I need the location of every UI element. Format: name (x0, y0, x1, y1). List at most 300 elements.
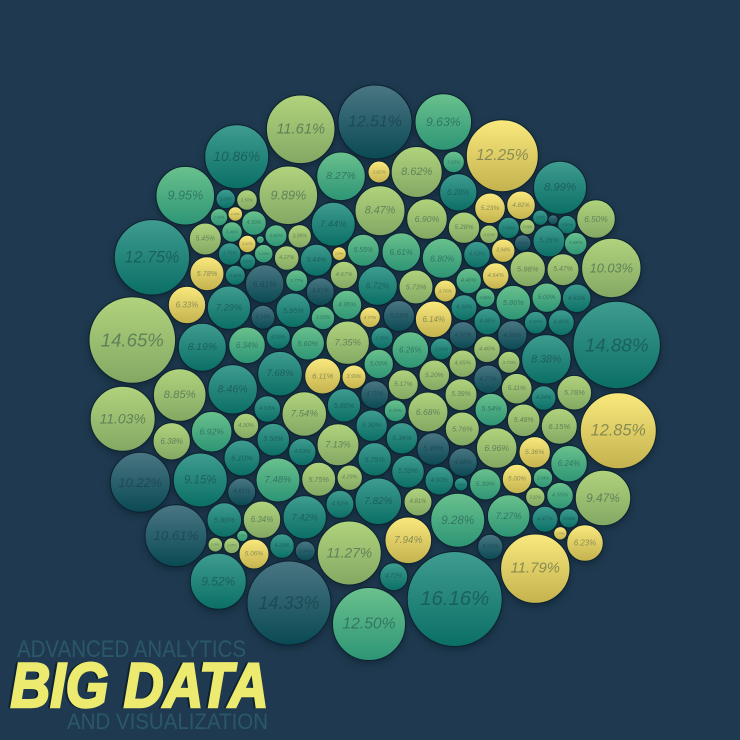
bubble 4.40% green: 4.40% (461, 278, 477, 284)
bubble 10.61%: 10.61% (153, 528, 199, 543)
bubble 5.11% (501, 373, 532, 404)
bubble 5.90%: 5.90% (214, 516, 235, 524)
bubble 3.88% center (476, 288, 495, 307)
bubble 4.95%: 4.95% (338, 302, 356, 308)
bubble 6.68% (408, 392, 448, 432)
bubble 5.55% (347, 234, 379, 266)
bubble 5.17% (388, 370, 418, 400)
bubble 7.82%: 7.82% (364, 496, 393, 507)
bubble 5.39% green (470, 469, 501, 500)
bubble 2.70%: 2.70% (555, 531, 565, 535)
bubble 11.79%: 11.79% (511, 561, 560, 577)
bubble 3.99% yellow (342, 365, 366, 389)
bubble 12.51%: 12.51% (348, 114, 402, 130)
bubble 14.33%: 14.33% (258, 593, 320, 613)
bubble 9.52% (190, 553, 246, 609)
bubble 7.29%: 7.29% (216, 303, 242, 313)
bubble 7.68% (258, 351, 302, 396)
bubble 4.29% teal (270, 534, 294, 558)
bubble 2.10% (548, 215, 558, 225)
bubble 5.44%: 5.44% (307, 257, 326, 264)
bubble 3.29% (384, 400, 406, 422)
bubble 3.77% green: 3.77% (290, 278, 303, 283)
title block (8, 636, 268, 734)
bubble 4.29% light: 4.29% (342, 475, 358, 481)
bubble 5.78% light: 5.78% (564, 388, 585, 397)
bubble 7.29% (207, 286, 251, 329)
bubble 12.75% (114, 220, 190, 295)
bubble 3.92%: 3.92% (435, 346, 448, 352)
bubble 5.98% (510, 251, 545, 287)
bubble 6.92%: 6.92% (199, 427, 224, 437)
bubble 5.73% (399, 270, 433, 304)
bubble 5.00% yellow (502, 464, 532, 494)
bubble 11.61% (266, 95, 335, 164)
bubble 6.61% dark (245, 265, 284, 303)
bubble 4.90%: 4.90% (431, 477, 449, 484)
bubble 2.10%: 2.10% (549, 219, 556, 221)
bubble 5.60% (291, 327, 324, 360)
bubble 4.52% (449, 322, 477, 349)
bubble 9.28%: 9.28% (441, 514, 474, 527)
bubble 3.53%: 3.53% (563, 516, 575, 521)
bubble 5.90% (207, 503, 242, 537)
bubble 7.48% (256, 458, 300, 502)
bubble 4.40% teal: 4.40% (553, 320, 569, 326)
bubble 5.75% light: 5.75% (308, 475, 330, 484)
bubble 5.75% light (302, 462, 336, 496)
bubble 10.86%: 10.86% (213, 149, 260, 164)
bubble 6.33%: 6.33% (176, 300, 198, 310)
bubble 8.38% (522, 335, 571, 384)
bubble 5.78% light (557, 375, 592, 410)
bubble 3.88% (564, 232, 587, 255)
bubble 3.78% (371, 327, 393, 349)
bubble 3.99% light: 3.99% (293, 233, 307, 239)
bubble 3.05% light: 3.05% (227, 544, 237, 548)
bubble 4.24%: 4.24% (536, 395, 551, 401)
bubble 4.33% (478, 534, 503, 560)
bubble 4.55%: 4.55% (552, 493, 568, 499)
bubble 3.76%: 3.76% (439, 288, 452, 294)
bubble 9.47% (575, 470, 631, 526)
bubble 3.09%: 3.09% (523, 225, 532, 229)
bubble 5.00% center: 5.00% (370, 360, 388, 368)
bubble 2.30% (256, 236, 264, 244)
bubble 3.88%: 3.88% (569, 240, 583, 246)
bubble 4.77% (474, 365, 502, 394)
bubble 6.50% (577, 200, 615, 238)
bubble 3.32% (526, 487, 545, 507)
bubble 5.66%: 5.66% (334, 401, 355, 410)
bubble 4.34% (451, 295, 477, 321)
bubble 5.00% yellow: 5.00% (508, 476, 526, 482)
bubble 3.99% yellow: 3.99% (347, 374, 362, 380)
bubble 4.54% (482, 263, 509, 289)
bubble 7.54%: 7.54% (291, 408, 318, 420)
bubble 4.75%: 4.75% (366, 392, 384, 398)
bubble 4.83%: 4.83% (568, 295, 586, 302)
bubble 4.72%: 4.72% (385, 574, 403, 580)
bubble 3.50% teal: 3.50% (561, 222, 573, 227)
bubble 5.20% (419, 360, 450, 391)
bubble 4.30% light: 4.30% (238, 423, 254, 429)
bubble 4.06% (266, 325, 290, 349)
bubble 9.63%: 9.63% (426, 115, 461, 129)
bubble 2.94% (332, 247, 346, 261)
bubble 2.92%: 2.92% (241, 242, 253, 246)
bubble 5.47%: 5.47% (553, 266, 573, 273)
bubble 5.78% yellow (190, 257, 224, 291)
bubble 5.39% green: 5.39% (476, 481, 495, 488)
bubble 8.85% (153, 369, 206, 421)
bubble 8.27% (317, 152, 365, 201)
bubble 4.62%: 4.62% (331, 501, 349, 507)
bubble 4.30% green: 4.30% (246, 220, 262, 226)
bubble 4.34%: 4.34% (456, 305, 472, 311)
bubble 3.77% yellow (360, 307, 380, 328)
bubble 5.34%: 5.34% (392, 435, 412, 442)
bubble 3.94% (492, 239, 515, 262)
bubble 5.60%: 5.60% (298, 339, 318, 348)
bubble 2.60% (228, 207, 243, 221)
bubble 6.10%: 6.10% (231, 454, 253, 462)
bubble 10.03% (582, 238, 641, 298)
bubble 16.16% (407, 552, 502, 646)
bubble 5.00% upper: 5.00% (538, 294, 556, 301)
bubble 11.27% (317, 521, 381, 585)
bubble 7.82% (355, 478, 402, 525)
bubble 4.68% (449, 448, 477, 477)
bubble cluster (89, 85, 660, 660)
bubble 3.75% (218, 243, 241, 265)
bubble 4.61% (306, 278, 334, 306)
bubble 6.38% (153, 423, 190, 460)
bubble 16.16%: 16.16% (420, 588, 489, 610)
bubble 5.20%: 5.20% (425, 372, 444, 379)
bubble 9.28% (431, 493, 485, 547)
bubble 3.82% green: 3.82% (269, 233, 283, 238)
bubble 7.35%: 7.35% (335, 338, 361, 348)
bubble 4.58% (498, 321, 527, 350)
bubble 5.59% (392, 455, 424, 488)
bubble 3.77% yellow: 3.77% (364, 315, 376, 320)
bubble 6.34% light (243, 501, 281, 538)
bubble 3.46% (222, 222, 242, 242)
bubble 5.34% (386, 423, 418, 454)
bubble 3.03%: 3.03% (243, 260, 253, 264)
bubble 3.46%: 3.46% (226, 230, 238, 234)
bubble 5.98%: 5.98% (517, 264, 539, 274)
bubble 4.14%: 4.14% (256, 314, 271, 320)
bubble 2.50%: 2.50% (238, 534, 247, 538)
bubble 11.27%: 11.27% (326, 546, 372, 560)
bubble 4.81% dark: 4.81% (233, 489, 251, 495)
bubble 11.03%: 11.03% (99, 411, 146, 427)
bubble 4.53% (464, 241, 490, 268)
bubble 4.63%: 4.63% (294, 449, 311, 455)
bubble 5.56% (257, 423, 290, 456)
bubble 3.34% dark: 3.34% (299, 548, 312, 554)
bubble 3.50% light: 3.50% (241, 198, 253, 202)
bubble 4.54%: 4.54% (488, 273, 504, 279)
bubble 8.38%: 8.38% (531, 353, 561, 365)
bubble 3.05% (533, 210, 548, 225)
bubble 6.80% (422, 238, 462, 278)
bubble 5.73%: 5.73% (406, 282, 427, 292)
bubble 5.76% (445, 412, 479, 446)
bubble 9.52%: 9.52% (201, 574, 236, 588)
bubble 3.82% (368, 161, 390, 183)
bubble 4.82%: 4.82% (512, 202, 530, 209)
bubble 3.53% (559, 509, 579, 528)
bubble 4.81% light (404, 488, 432, 516)
bubble 6.15%: 6.15% (548, 422, 570, 431)
bubble 3.78%: 3.78% (375, 336, 389, 340)
bubble 14.65% (89, 297, 176, 383)
bubble 5.17%: 5.17% (394, 381, 413, 388)
bubble 6.72%: 6.72% (366, 281, 390, 291)
bubble 5.44% (300, 244, 332, 276)
bubble 3.59% (498, 217, 519, 239)
bubble 4.29% light (337, 465, 362, 490)
bubble 4.14% (251, 305, 275, 329)
bubble 4.27% (274, 246, 299, 270)
bubble 5.23% yellow (475, 193, 505, 224)
bubble 2.92% (239, 235, 256, 253)
bubble 6.34% green: 6.34% (236, 341, 258, 350)
bubble 8.62% (391, 146, 442, 198)
bubble 6.61% green (382, 233, 421, 271)
bubble 9.95%: 9.95% (167, 189, 203, 203)
bubble 5.46%: 5.46% (423, 446, 443, 452)
bubble 3.82% green (265, 225, 287, 247)
bubble 4.67% (330, 261, 358, 289)
bubble 2.70% (554, 527, 567, 540)
bubble 3.34% green: 3.34% (537, 476, 549, 480)
bubble 2.50% (237, 530, 248, 542)
bubble 12.25%: 12.25% (476, 147, 529, 164)
bubble 5.06% (239, 539, 269, 569)
bubble 12.50% (332, 588, 406, 660)
bubble 6.61% green: 6.61% (390, 247, 414, 257)
bubble 5.39% light: 5.39% (451, 391, 471, 398)
bubble 5.54% (475, 393, 508, 426)
bubble 5.23% dark: 5.23% (390, 312, 409, 320)
bubble 2.30%: 2.30% (257, 239, 263, 241)
bubble 5.86%: 5.86% (503, 298, 524, 307)
bubble 5.48%: 5.48% (514, 417, 534, 424)
bubble 3.75%: 3.75% (223, 250, 237, 256)
bubble 5.30%: 5.30% (362, 422, 381, 429)
bubble 6.90% (407, 199, 447, 239)
bubble 4.27%: 4.27% (279, 255, 294, 261)
bubble 9.95% (156, 166, 215, 225)
bubble 4.83% (562, 284, 591, 313)
bubble 8.99% (534, 161, 586, 214)
bubble 14.88% (573, 301, 660, 389)
bubble 4.30% light (233, 413, 259, 439)
bubble 6.90%: 6.90% (415, 214, 440, 224)
bubble 10.22% (110, 452, 170, 512)
bubble 3.34% dark (295, 541, 315, 561)
bubble 4.53%: 4.53% (469, 252, 485, 258)
bubble 7.68%: 7.68% (266, 368, 294, 379)
bubble 9.63% (415, 94, 472, 150)
bubble 3.93% (311, 306, 335, 330)
bubble 3.60% (216, 189, 235, 209)
bubble 9.89% (259, 166, 318, 225)
bubble 3.84%: 3.84% (529, 319, 543, 325)
bubble 6.23%: 6.23% (574, 538, 596, 548)
bubble 6.96% (476, 428, 517, 468)
bubble 7.35% (326, 321, 369, 364)
bubble 4.29% teal: 4.29% (274, 543, 290, 549)
bubble 6.15% (541, 408, 577, 444)
bubble 3.73% (498, 351, 520, 373)
bubble 7.27%: 7.27% (496, 511, 522, 521)
bubble 4.46%: 4.46% (479, 346, 495, 352)
bubble 3.21% (480, 225, 498, 244)
bubble 4.95% (332, 290, 362, 320)
bubble 5.75% teal: 5.75% (365, 455, 385, 464)
bubble 7.13%: 7.13% (325, 440, 351, 450)
bubble 3.32%: 3.32% (529, 494, 542, 500)
bubble 4.58%: 4.58% (503, 332, 522, 339)
bubble 3.73%: 3.73% (502, 360, 516, 365)
bubble 14.88%: 14.88% (585, 334, 649, 356)
bubble 3.30%: 3.30% (229, 273, 242, 278)
bubble 3.59%: 3.59% (502, 226, 515, 230)
bubble 5.55%: 5.55% (354, 247, 373, 254)
bubble 5.06%: 5.06% (245, 550, 263, 558)
title: big data: BIG DATA (10, 651, 268, 721)
bubble 4.24% (531, 386, 556, 410)
bubble 5.45%: 5.45% (196, 236, 215, 242)
bubble 8.99%: 8.99% (544, 182, 576, 194)
bubble 5.23% yellow: 5.23% (481, 205, 499, 212)
bubble 3.50% light (237, 190, 257, 210)
bubble 9.15% (173, 453, 227, 507)
bubble 6.28%: 6.28% (447, 188, 470, 197)
bubble 5.46% (417, 433, 450, 465)
bubble 3.09% (520, 219, 535, 235)
bubble 3.50% teal (558, 215, 576, 234)
bubble 5.76%: 5.76% (452, 424, 473, 434)
bubble 5.56%: 5.56% (263, 436, 283, 443)
bubble 6.80%: 6.80% (430, 253, 455, 263)
bubble 6.23% (567, 525, 603, 561)
bubble 4.68%: 4.68% (454, 459, 472, 466)
bubble 4.30% green (242, 211, 266, 235)
bubble 6.38%: 6.38% (160, 437, 183, 446)
bubble 7.94%: 7.94% (394, 535, 423, 546)
bubble 8.47%: 8.47% (365, 205, 396, 217)
bubble 7.42% (283, 496, 326, 539)
bubble 6.11%: 6.11% (312, 372, 333, 380)
bubble 6.96%: 6.96% (484, 443, 509, 453)
bubble 5.28% (448, 212, 480, 243)
bubble 5.66% (327, 389, 361, 422)
bubble 8.85%: 8.85% (164, 389, 196, 401)
bubble 6.14%: 6.14% (423, 315, 445, 324)
bubble 3.05%: 3.05% (536, 216, 545, 220)
bubble 8.19%: 8.19% (188, 342, 217, 353)
bubble 2.88% (454, 478, 468, 491)
bubble 3.02%: 3.02% (518, 241, 529, 245)
bubble 3.99% light (288, 225, 311, 248)
bubble 6.14% (415, 301, 452, 338)
bubble 4.75% (361, 381, 389, 409)
bubble 3.29%: 3.29% (389, 408, 402, 413)
bubble 3.34% green (533, 468, 553, 488)
bubble 2.88%: 2.88% (456, 482, 466, 486)
bubble 7.27% (487, 495, 530, 537)
bubble 6.26% (392, 332, 429, 368)
bubble 3.88% center: 3.88% (479, 295, 492, 300)
bubble 5.54%: 5.54% (481, 406, 501, 413)
bubble 5.36% (519, 437, 550, 468)
bubble 8.46%: 8.46% (218, 383, 248, 395)
bubble 12.85%: 12.85% (591, 422, 646, 440)
bubble 5.26%: 5.26% (539, 238, 559, 244)
bubble 8.46% (208, 365, 257, 414)
bubble 6.61% dark: 6.61% (253, 279, 277, 289)
bubble 7.48%: 7.48% (265, 474, 292, 486)
bubble 6.34% light: 6.34% (251, 515, 273, 524)
bubble 4.55% (547, 482, 573, 509)
bubble 11.03% (90, 386, 155, 451)
bubble 4.65%: 4.65% (454, 361, 471, 367)
bubble 4.40% teal (548, 310, 574, 336)
bubble 4.47%: 4.47% (537, 516, 553, 522)
bubble 6.34% green (229, 327, 265, 364)
bubble 5.75% teal (358, 443, 391, 476)
bubble 6.68%: 6.68% (416, 407, 441, 417)
bubble 4.72% (380, 563, 408, 591)
title shadow: big data: BIG DATA (8, 651, 266, 721)
bubble 6.10% (224, 440, 260, 476)
bubble 2.93% (210, 209, 228, 226)
bubble 4.46% (474, 336, 500, 363)
bubble 3.30% (225, 265, 245, 285)
bubble 4.06%: 4.06% (271, 334, 286, 340)
bubble 4.48% (474, 308, 501, 335)
bubble 5.30% (356, 410, 387, 441)
bubble 10.61% (145, 505, 207, 567)
bubble 3.76% (434, 280, 456, 302)
bubble 4.81% dark (228, 478, 256, 506)
bubble 5.47% (547, 254, 579, 286)
bubble 3.20% (254, 244, 273, 263)
bubble 8.47% (355, 186, 405, 236)
bubble 14.33% (247, 561, 331, 645)
bubble 2.60%: 2.60% (230, 212, 240, 216)
bubble 6.28% (440, 174, 477, 211)
bubble 5.59%: 5.59% (398, 468, 418, 475)
bubble 3.02% (514, 235, 531, 251)
bubble 3.77% green (286, 270, 308, 292)
bubble 5.95%: 5.95% (283, 306, 304, 315)
bubble 6.92% (191, 411, 232, 452)
bubble 9.15%: 9.15% (184, 474, 217, 486)
bubble 2.95% (208, 537, 223, 552)
bubble 6.24%: 6.24% (558, 459, 580, 468)
bubble 4.67%: 4.67% (336, 272, 352, 278)
bubble 3.93%: 3.93% (316, 315, 331, 321)
bubble 3.92% (430, 338, 452, 360)
bubble 6.72% (358, 266, 397, 305)
